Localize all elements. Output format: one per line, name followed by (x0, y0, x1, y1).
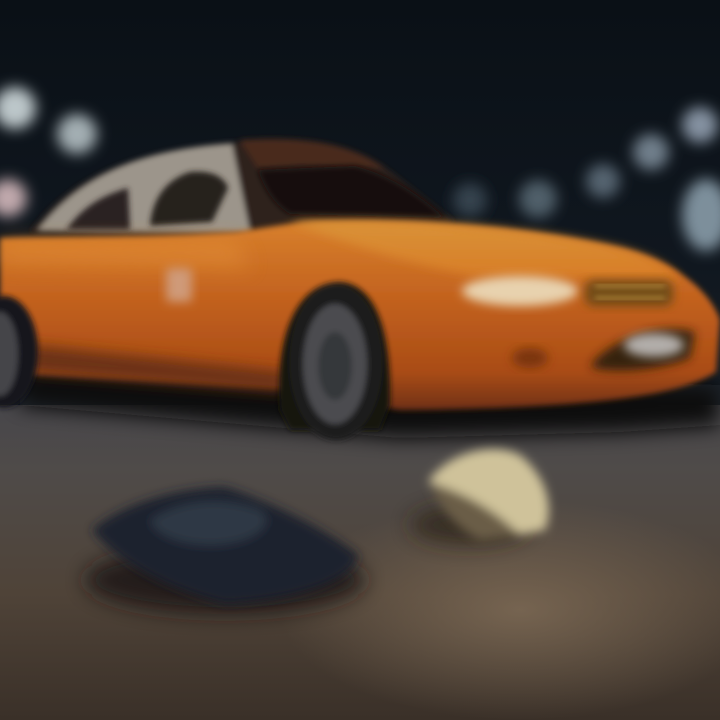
grille (585, 280, 673, 306)
ground surface (0, 405, 720, 720)
car roof and cabin (30, 139, 455, 240)
key fob (428, 449, 549, 540)
background: dark night sky (0, 0, 720, 440)
lower intake (592, 329, 695, 371)
headlight (462, 276, 578, 306)
lower sill shadow (30, 345, 285, 392)
front marker light (624, 333, 684, 357)
door handle (166, 268, 192, 302)
wallet shadow (85, 546, 365, 614)
background lights (0, 87, 720, 251)
ground light patch (280, 500, 720, 720)
rear wheel (0, 296, 38, 408)
car shoulder highlight (0, 238, 250, 268)
car shadow (20, 365, 720, 438)
front wheel (279, 282, 390, 440)
fog light (512, 348, 548, 368)
car (0, 139, 720, 440)
car windows (66, 166, 445, 230)
car body (0, 221, 720, 410)
key fob shadow (410, 505, 530, 545)
car hood highlight (290, 221, 680, 280)
wallet (92, 487, 358, 604)
